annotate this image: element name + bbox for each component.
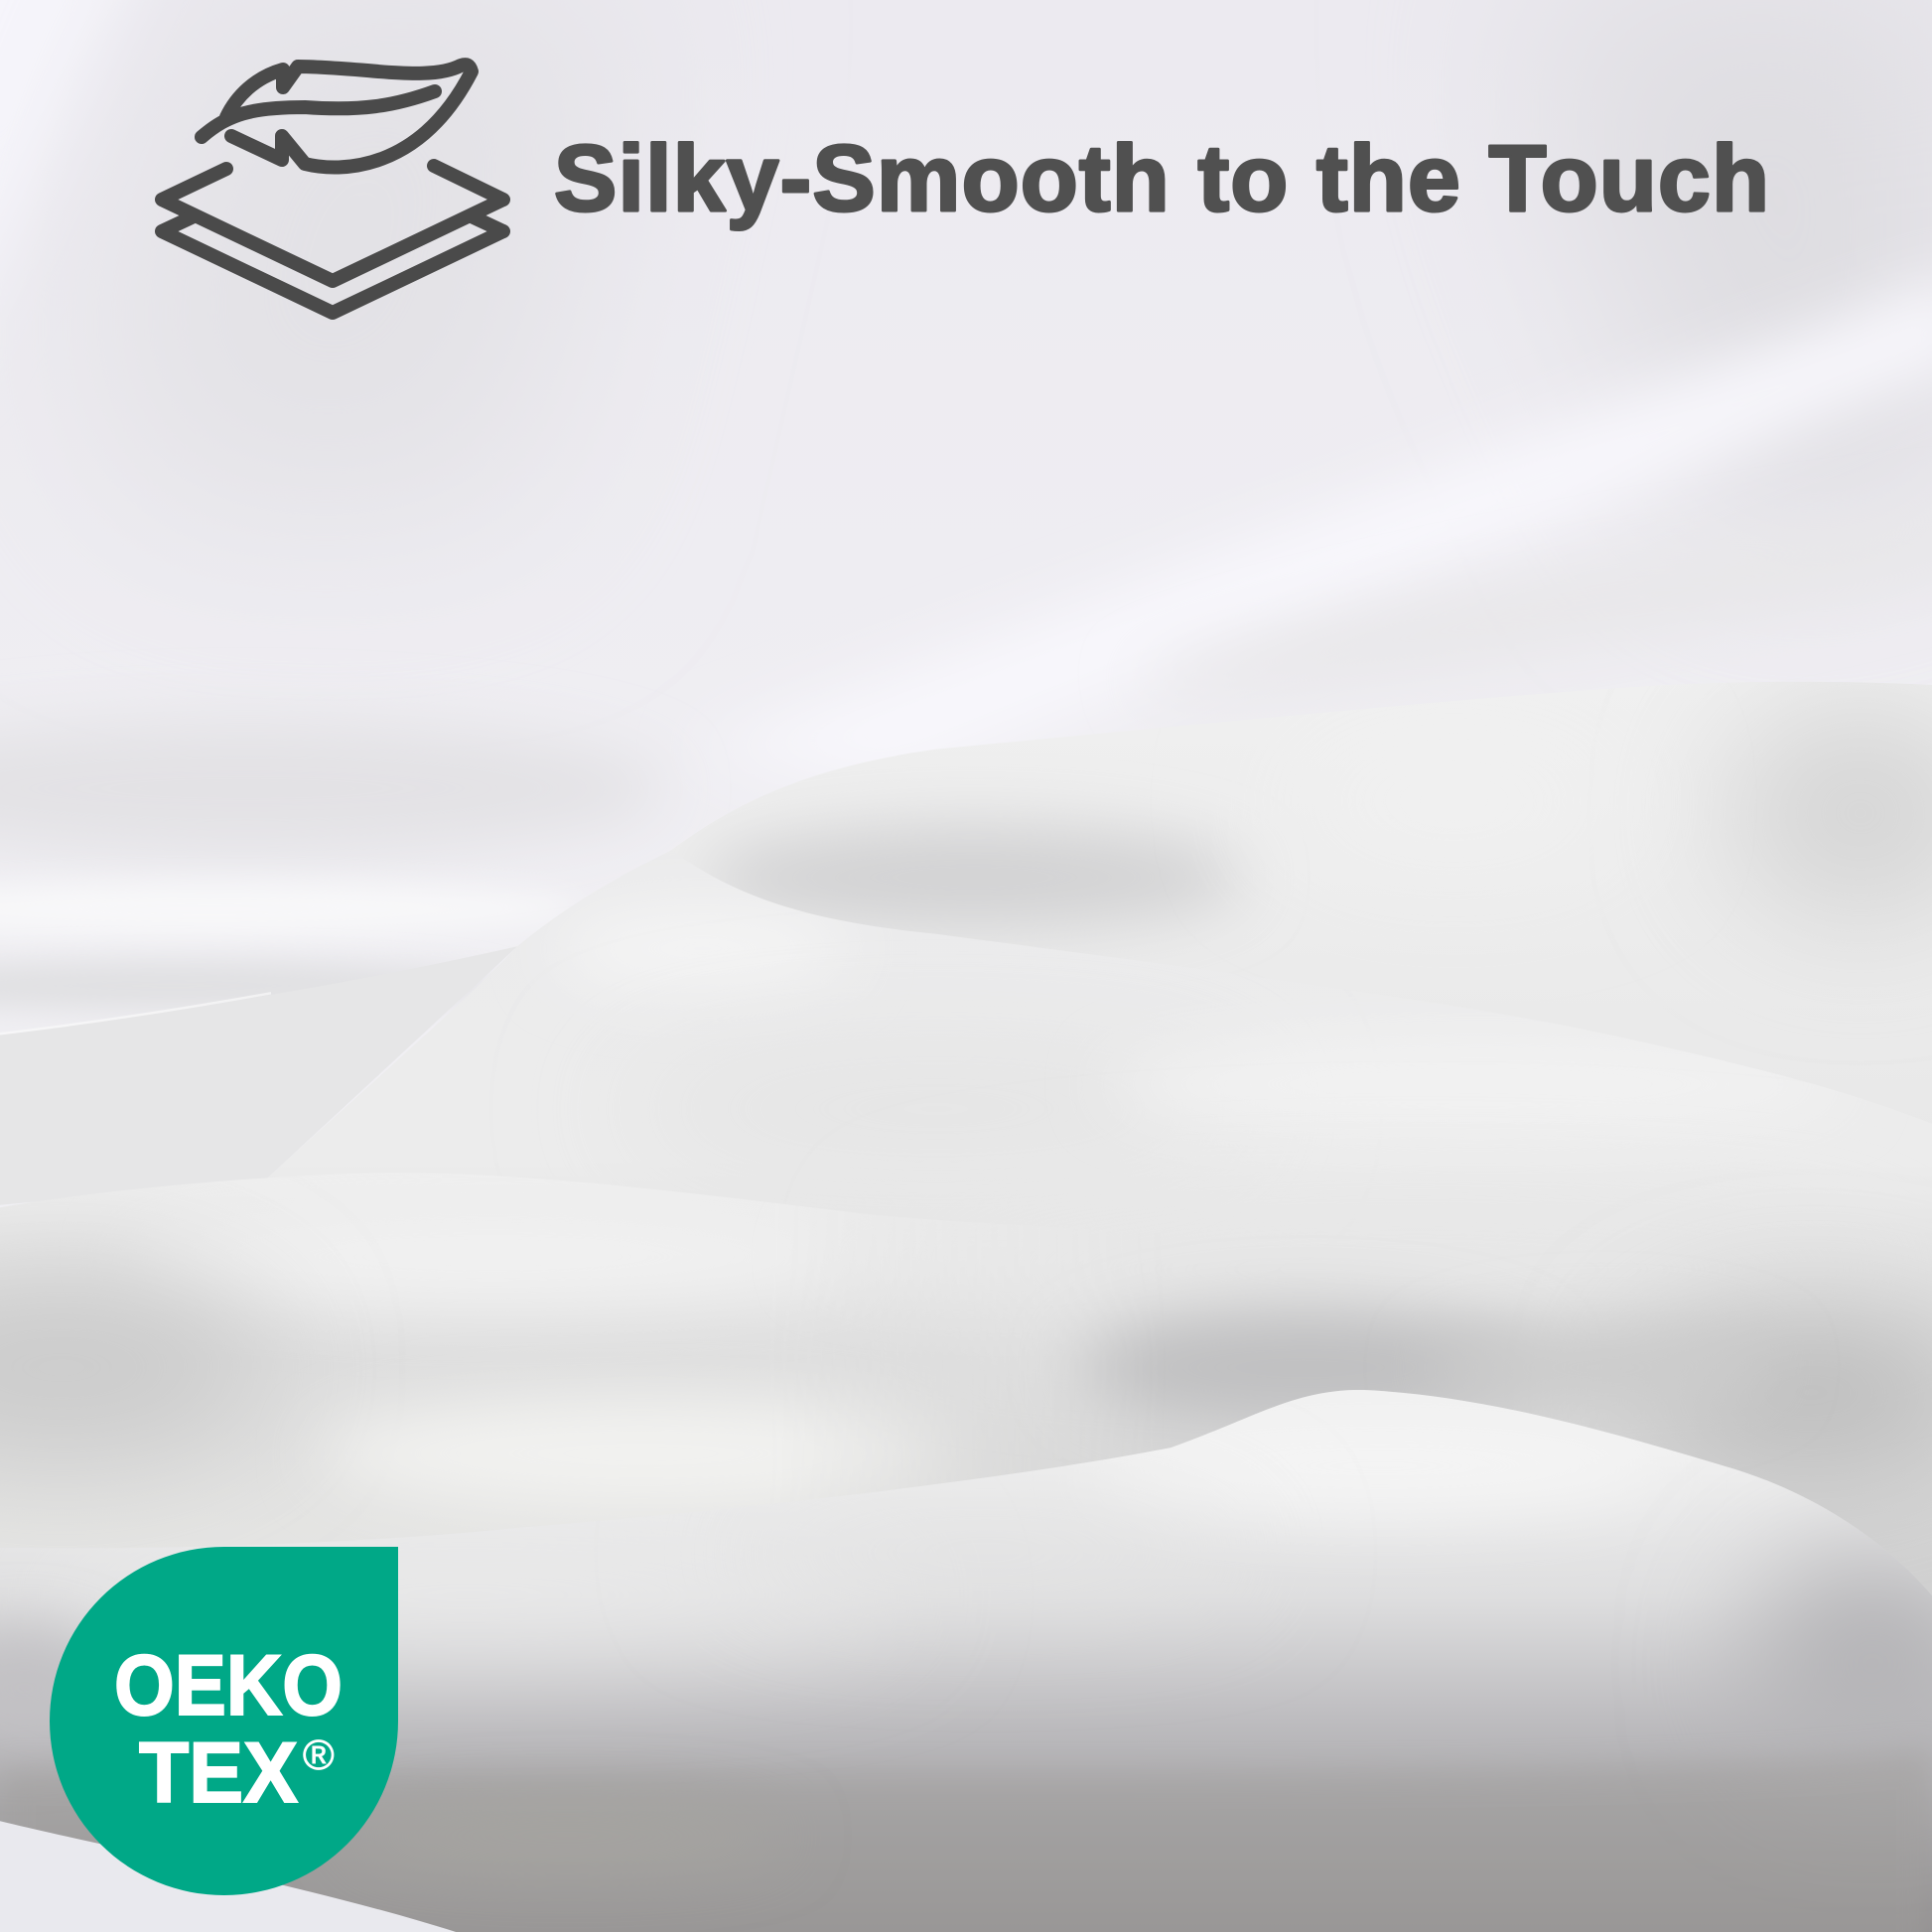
badge text: TEX: TEX	[139, 1725, 298, 1821]
front fabric fold	[0, 1386, 1932, 1932]
front-middle fabric fold	[0, 1178, 956, 1549]
badge text: OEKO: OEKO	[114, 1638, 343, 1733]
back-right fabric fold	[682, 682, 1932, 1124]
badge: OEKO-TEX green drop	[50, 1547, 398, 1895]
badge text: registered mark: ®	[303, 1731, 335, 1779]
bottom-left white fabric patch	[0, 1821, 456, 1932]
icon part: bottom fabric layer	[162, 216, 503, 313]
heading: Silky-Smooth to the Touch	[554, 126, 1769, 231]
icon part: feather	[202, 65, 472, 168]
icon part: top fabric layer	[162, 166, 503, 281]
back-left fabric fold	[0, 946, 517, 1205]
middle fabric fold	[265, 838, 1932, 1626]
icon: feather over fabric layers	[162, 65, 503, 313]
